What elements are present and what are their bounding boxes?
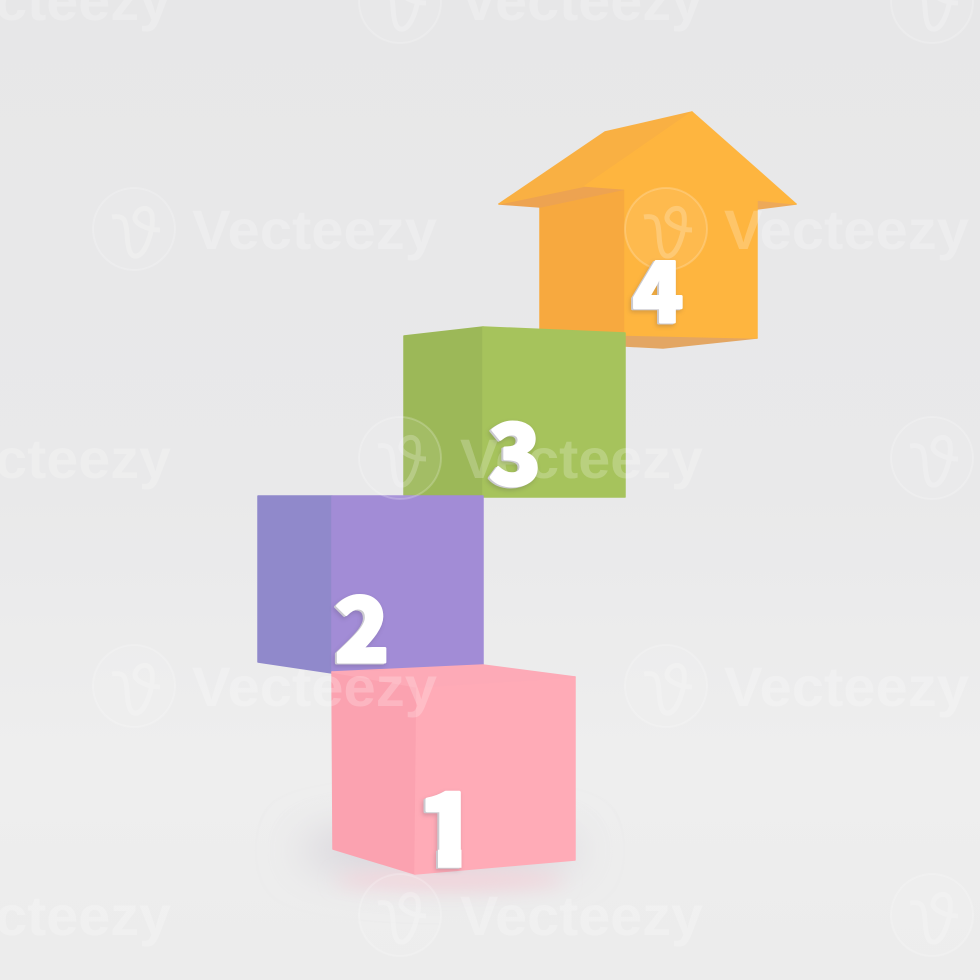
watermarks: Vecteezy xyxy=(192,198,437,261)
watermarks: Vecteezy xyxy=(460,884,703,947)
watermarks: Vecteezy xyxy=(192,655,437,718)
floor pink reflection xyxy=(335,871,565,889)
number 1: 1 xyxy=(417,750,479,896)
arrow bottom face xyxy=(625,335,757,348)
block 3: green cube xyxy=(404,327,625,497)
arrow head underside left xyxy=(499,186,625,207)
arrow left face xyxy=(540,189,625,340)
number 4: 4 xyxy=(633,226,683,346)
watermarks: Vecteezy xyxy=(724,655,969,718)
floor shadow xyxy=(300,828,580,872)
infographic: stacked numbered blocks with arrow xyxy=(104,111,972,944)
watermarks: Vecteezy xyxy=(460,427,703,490)
pink right face xyxy=(415,677,575,874)
block 2: purple cube xyxy=(258,496,483,673)
number 2: 2 xyxy=(335,558,389,688)
block 1: pink cube xyxy=(332,665,575,874)
purple left face xyxy=(258,496,332,673)
purple right face xyxy=(332,496,483,673)
arrow front face xyxy=(585,112,796,338)
block 4: orange arrow xyxy=(499,112,796,348)
arrow head underside right xyxy=(757,200,796,209)
arrow head slope xyxy=(499,112,692,204)
pink left face xyxy=(332,672,417,874)
pink top face xyxy=(332,665,575,687)
green right face xyxy=(483,327,625,497)
number 3: 3 xyxy=(489,387,541,510)
green left face xyxy=(404,327,483,497)
watermarks: Vecteezy xyxy=(724,198,969,261)
